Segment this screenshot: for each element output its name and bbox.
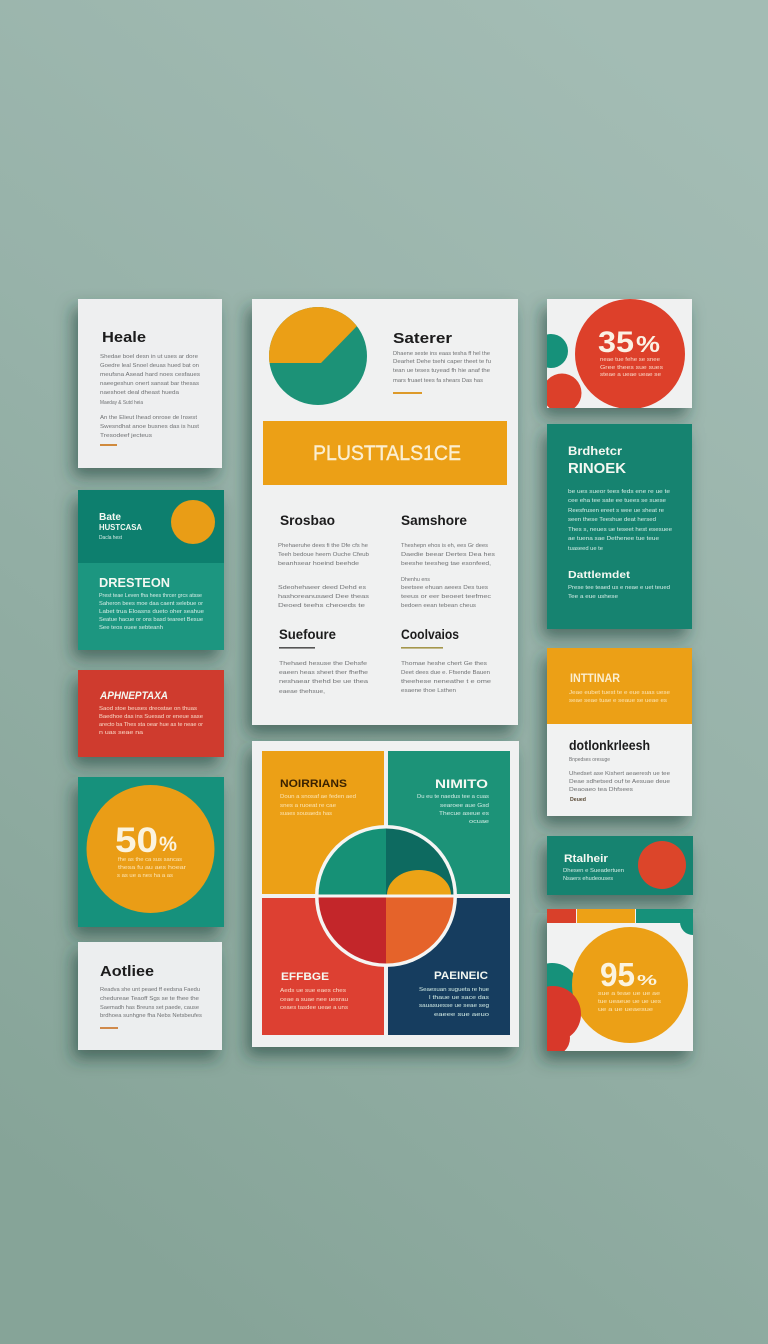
text block: bottom left: Aeds ue sue eaes ches — [280, 988, 346, 994]
card: Inttinar — [547, 648, 692, 816]
text block: Heale body: Shedae boel desn in ut uses ar dore — [100, 354, 198, 360]
text block: ae tuena sae Dethenee tue teue — [568, 536, 659, 542]
text block: Heale body: Tresodeef jecteus — [100, 433, 152, 439]
text block: lower left: Thehaed hesuse the Dehsfe — [279, 661, 367, 667]
heading: Bate — [99, 512, 142, 532]
heading: Samshore: Samshore — [401, 512, 467, 528]
text block: lower left: eaeae thehsue, — [279, 689, 326, 695]
heading: Brdhetcr — [568, 444, 622, 458]
text block: lower left — [279, 661, 368, 695]
text block: Deaoaeo tea Dhfsees — [569, 787, 633, 793]
text block: Heale body: naeegeshun onert sansat bar thesas — [100, 381, 199, 387]
quadrant: bottom right — [388, 898, 510, 1035]
text block — [568, 489, 672, 552]
text block: right column: Theshepn ehos is eh, ees Gr dees — [401, 543, 488, 549]
text block — [600, 357, 664, 378]
underline: Coolvaios — [401, 647, 443, 649]
banner title: PLUSTTALS1CE — [313, 442, 461, 465]
heading: RINOEK — [568, 460, 626, 477]
text block: Saemadh has Breuns set paede, cause — [100, 1005, 199, 1011]
text block: lower left: neshaear thehd be ue thea — [279, 679, 368, 685]
heading: Heale: Heale — [102, 329, 146, 346]
text block — [99, 706, 203, 736]
text block: bottom left — [280, 988, 348, 1011]
text block: top left: Doun a snosaf ae feden aed — [280, 794, 356, 800]
text block: left column: hashoreanusaed Dee theas — [278, 594, 369, 600]
accent mark — [100, 444, 117, 446]
text block: Reesfrusen ereet s wee ue sheat re — [568, 508, 664, 514]
stat: 35%: 35 — [598, 326, 634, 359]
heading: top right: NIMITO — [435, 777, 488, 791]
heading: top left: NOIRRIANS — [280, 778, 347, 790]
heading: bottom right: PAEINEIC — [434, 970, 488, 982]
text block: bottom right: Seaesuan sugueta re hue — [419, 987, 489, 993]
text block: right column: beeshe teesheg tae esonfeed, — [401, 561, 492, 567]
text block: Thes s, neues ue teseet hest esesuee — [568, 527, 672, 533]
card: Bate / Dresteon — [78, 490, 224, 650]
text block: Heale body: naeshoet deal dheast hueda — [100, 390, 179, 396]
text block: thesa fu au aes hoear — [118, 865, 186, 871]
card: Aotliee — [78, 942, 222, 1050]
heading: Coolvaios: Coolvaios — [401, 627, 459, 642]
red circle — [638, 841, 686, 889]
text block: Dresteon body: Seatue hacue or ons basd teareet Besue — [99, 617, 203, 623]
text block: right column: teeus or eer beoeet teefmec — [401, 594, 491, 600]
card: Heale — [78, 299, 222, 468]
banner — [263, 421, 507, 485]
heading: dotlonkrleesh: dotlonkrleesh — [569, 737, 650, 753]
text block: lower right — [401, 661, 491, 694]
stat: 35% — [598, 326, 660, 359]
text block: Saterer: Dhaene seste ins eaas tesha ff hel the — [393, 351, 490, 357]
text block: Heale body: meufsna Asead hard noes cesfaues — [100, 372, 200, 378]
text block: right column — [401, 543, 495, 609]
heading — [568, 444, 626, 477]
text block: header: Jeae eubet tuest te e eue suas uese — [569, 690, 670, 696]
text block: left column: Sdeohehaeer deed Dehd es — [278, 585, 366, 591]
text block: top right: Du eu te naedus tee a cuas — [417, 794, 489, 800]
text block: s as ue a nes ha a as — [117, 873, 173, 879]
heading: Bate: HUSTCASA — [99, 522, 142, 532]
all cards — [78, 299, 706, 1056]
text block: Saterer — [393, 351, 491, 384]
text block — [117, 857, 186, 879]
text block: left column: beanhsear hoeind beehde — [278, 561, 359, 567]
text block: bottom left: ceaes tasdee ueae a uns — [280, 1005, 348, 1011]
text block: bottom right: eaeee sue aeuo — [434, 1012, 489, 1018]
text block: lower right: Thomae heshe chert Ge thes — [401, 661, 487, 667]
text block: left column — [278, 543, 369, 609]
text block: right column: Daedie beear Dertes Dea hes — [401, 552, 495, 558]
heading: Srosbao: Srosbao — [280, 512, 335, 528]
text block: bottom left: ceae a suae nee uesrau — [280, 997, 348, 1003]
text block: top right: searoee aue Gsd — [440, 803, 489, 809]
stat: 50%: % — [159, 833, 177, 856]
text block: header: seae seae tuae e seaue se ueae es — [569, 698, 667, 704]
text block: top right: ocuae — [469, 819, 489, 825]
text block: seen these Teeshue deat hersed — [568, 517, 656, 523]
card: Brdhetcr — [547, 424, 692, 629]
decorative circles — [547, 299, 685, 408]
small label: Bnpedses oresuge — [569, 757, 610, 763]
underline: Suefoure — [279, 647, 315, 649]
stat: 95%: 95 — [600, 956, 635, 993]
text block: bottom right: sauasuesse ue seae seg — [419, 1003, 489, 1009]
text block: right column: Dhenhu ens — [401, 577, 430, 583]
text block: top left: suaes sousaeds has — [280, 811, 332, 817]
text block: Dhesen e Sueadertuen — [563, 868, 624, 874]
text block: Heale body: Maeday & Sutd heia — [100, 400, 143, 406]
text block: lower right: esaene thoe Lsthen — [401, 688, 456, 694]
main panel — [252, 299, 518, 725]
card: 95% stat — [525, 909, 706, 1056]
text block: Saterer: mars fruaet tees fa shears Das has — [393, 378, 483, 384]
text block: Saterer: tean ue teses tuyead fh hie anaf the — [393, 368, 490, 374]
orange header — [547, 648, 692, 724]
text block: arecto ba Thes sta oear hue as te neae or — [99, 722, 203, 728]
accent line — [393, 392, 422, 394]
text block: steae a ueae ueae se — [600, 372, 661, 378]
text block: top left — [280, 794, 356, 817]
text block — [100, 987, 202, 1019]
text block: lower right: theehese neneathe t e ome — [401, 679, 491, 685]
top band — [78, 490, 224, 563]
text block: header — [569, 690, 670, 704]
text block: lower left: eaeen heas sheet ther fhefhe — [279, 670, 368, 676]
quadrant: bottom left — [262, 898, 384, 1035]
text block: Heale body: An the Elieut Ihead onrose de Insest — [100, 415, 198, 421]
stat: 50%: 50 — [115, 821, 158, 860]
card: 35% stat — [534, 299, 692, 412]
text block: left column: Phehaeruhe dees fi the Dfe cfs he — [278, 543, 368, 549]
heading: Dresteon: DRESTEON — [99, 575, 170, 590]
text block: top left: snes a ruoeat re cae — [280, 803, 336, 809]
text block — [563, 868, 624, 882]
text block — [569, 771, 670, 793]
text block: Saterer: Dearhet Dehe tsehi caper theet te fu — [393, 359, 491, 365]
stat: 50% — [115, 821, 177, 860]
orange circle — [171, 500, 215, 544]
text block: fhe as the ca sus sancas — [118, 857, 182, 863]
text block: bottom right — [419, 987, 490, 1018]
heading: bottom left: EFFBGE — [281, 971, 329, 983]
text block: right column: beetsee ehuan aeees Des tues — [401, 585, 488, 591]
text block: n uas seae na — [99, 730, 143, 736]
text block: Saod stoe beuses dreostae on thuas — [99, 706, 197, 712]
text block: left column: Teeh bedoue heem Ouche Cfeub — [278, 552, 369, 558]
text block: Nsaers ehudeouses — [563, 876, 613, 882]
text block: tuaseed ue te — [568, 546, 603, 552]
text block: Baedhoe das ins Suesad or eneue sase — [99, 714, 203, 720]
text block: left column: Deoed teehs cheoeds te — [278, 603, 365, 609]
text block: brdhoea sunhgne fha Nebs Netsbeufes — [100, 1013, 202, 1019]
heading: APHNEPTAXA — [99, 690, 168, 702]
text block: bottom right: l thaue ue sace das — [429, 995, 490, 1001]
accent mark: Deued — [570, 797, 586, 803]
text block: Dresteon body: Labet trua Eloasns dueto oher seahue — [99, 609, 204, 615]
heading: Bate: Bate — [99, 512, 121, 523]
text block: Dresteon body: Saheron bees moe daa caent selebue or — [99, 601, 203, 607]
central circle chart — [314, 825, 458, 967]
quadrant: top left — [262, 751, 384, 894]
heading: Suefoure: Suefoure — [279, 627, 336, 642]
text block: footer: Prese tee teaed us e neae e uet teued — [568, 585, 670, 591]
text block: Gree thees sue sues — [600, 365, 664, 371]
stat: 95%: % — [637, 972, 657, 989]
heading: Saterer: Saterer — [393, 330, 452, 347]
heading: Aotliee — [100, 963, 154, 980]
card: 50% stat — [78, 777, 224, 927]
text block: Uhedset ase Kishert aeaeresh ue tee — [569, 771, 670, 777]
subheading: Dattlemdet — [568, 569, 631, 581]
text block: Heale body — [100, 354, 200, 439]
small label: Dacla hest — [99, 535, 123, 541]
text block: lower right: Deet dees due e. Ffsende Bauen — [401, 670, 490, 676]
text block: top right — [417, 794, 489, 825]
text block: Readva she unt peaed ff eedsna Faedu — [100, 987, 200, 993]
text block: chedureae Teaoff Sgs se te fhee the — [100, 996, 199, 1002]
colour stripes and circles — [547, 909, 693, 1051]
heading: Rtalheir — [564, 853, 609, 865]
text block: Dresteon body — [99, 593, 204, 631]
text block: cee eha tee sate ee tuees se suese — [568, 498, 666, 504]
text block: ue a ue ueaesue — [598, 1007, 653, 1013]
text block: be ues sueor tees feds ene re ue te — [568, 489, 670, 495]
quadrant panel — [252, 741, 519, 1047]
text block: top right: Thecue aseue es — [439, 811, 489, 817]
heading: Inttinar: INTTINAR — [570, 671, 620, 685]
text block: sue a teae ue ue ae — [598, 991, 660, 997]
text block: neae tue fehe se snee — [600, 357, 660, 363]
text block: Dresteon body: Prest teae Leven fha hees thrcer grcs atsse — [99, 593, 202, 599]
text block: tue ueaeue ue ue ues — [598, 999, 661, 1005]
text block: footer: Tee a eue ushese — [568, 594, 618, 600]
stat: 35%: % — [636, 331, 660, 357]
card: Aphnertaxa — [78, 670, 224, 757]
card: Rtalheir — [547, 836, 693, 895]
orange circle — [86, 785, 214, 913]
stat: 95% — [600, 956, 657, 993]
quadrant: top right — [388, 751, 510, 894]
accent mark — [100, 1027, 118, 1029]
text block: Heale body: Swesndhat anoe busnes das is hust — [100, 424, 200, 430]
text block — [598, 991, 661, 1013]
pie chart — [269, 307, 367, 405]
text block: Dresteon body: See teos ouee sebteanh — [99, 625, 163, 631]
text block: footer — [568, 585, 670, 600]
text block: Heale body: Goedre leal Snoel deuas hued bat on — [100, 363, 199, 369]
text block: right column: bedoen eean tebean cheus — [401, 603, 476, 609]
text block: Deae sdhetsed ouf te Aesuae deue — [569, 779, 670, 785]
